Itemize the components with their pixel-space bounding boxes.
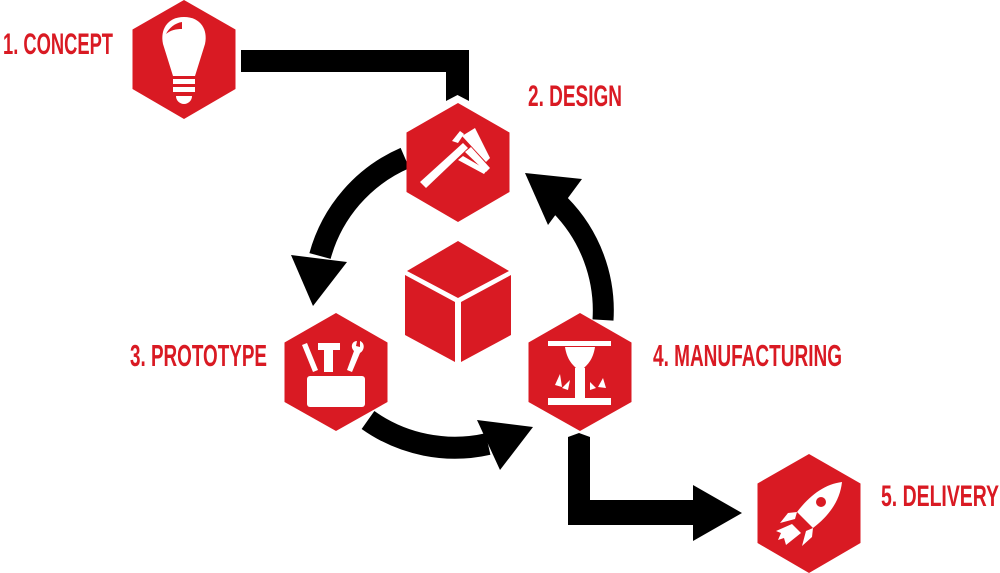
hexagon: prototype with toolbox icon xyxy=(284,313,388,431)
arrow: manufacturing to design xyxy=(525,173,603,320)
hexagon: design with caliper icon xyxy=(406,103,510,222)
icon: rocket xyxy=(776,482,842,546)
arrow: design to prototype xyxy=(291,158,405,306)
hexagon: concept with lightbulb icon xyxy=(132,0,236,119)
icon: lightbulb xyxy=(162,17,206,104)
label: 3. PROTOTYPE: 3. PROTOTYPE xyxy=(130,338,267,373)
label: 2. DESIGN: 2. DESIGN xyxy=(528,80,622,113)
arrow: prototype to manufacturing xyxy=(368,420,533,470)
label: 1. CONCEPT: 1. CONCEPT xyxy=(3,28,113,61)
label: 4. MANUFACTURING: 4. MANUFACTURING xyxy=(653,338,842,373)
central cube xyxy=(405,241,511,362)
icon: milling machine xyxy=(548,341,611,405)
icon: caliper xyxy=(420,128,490,188)
connector arrow: concept to design xyxy=(241,50,469,101)
connector arrow: manufacturing to delivery xyxy=(568,433,742,541)
hexagon: manufacturing with milling icon xyxy=(528,313,632,431)
icon: toolbox xyxy=(302,341,365,407)
hexagon: delivery with rocket icon xyxy=(758,454,860,573)
